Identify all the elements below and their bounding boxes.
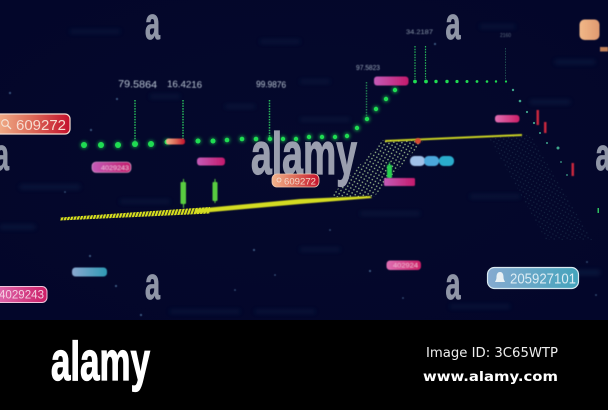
footer bar bbox=[0, 320, 608, 410]
badge: pink right bbox=[495, 115, 520, 122]
chart: value labels bbox=[118, 30, 511, 91]
badge: pink small left bbox=[92, 162, 131, 172]
badge: pink lower center: 402924 bbox=[393, 264, 419, 270]
chart: value labels: 34.2187 bbox=[406, 30, 434, 36]
chart: vertical dotted markers bbox=[135, 46, 506, 142]
badge: peach edge bbox=[600, 47, 608, 52]
watermark letters: a bbox=[0, 0, 608, 309]
badge: search 609272 left: 609272 bbox=[16, 118, 66, 134]
chart: value labels: 2160 bbox=[500, 33, 511, 39]
badge: search 609272 center: 609272 bbox=[284, 176, 316, 186]
badge: red on line bbox=[166, 138, 185, 144]
panel: chart background bbox=[0, 0, 608, 320]
badge: pink 4029243 lower left: 4029243 bbox=[0, 288, 44, 302]
chart: value labels: 16.4216 bbox=[167, 79, 202, 91]
badge: search 609272 center bbox=[272, 174, 319, 187]
watermark letters: a: a bbox=[446, 258, 461, 309]
large watermark: alamy: alamy bbox=[251, 121, 357, 187]
chart: green candlesticks bbox=[180, 162, 392, 208]
chart: value labels: 97.5823 bbox=[356, 65, 380, 72]
chart: red candlesticks bbox=[536, 110, 574, 176]
footer logo: alamy: alamy bbox=[51, 330, 150, 392]
chart: value labels: 99.9876 bbox=[256, 79, 286, 90]
badge: pink small left: 4029243 bbox=[101, 165, 129, 172]
badge: pink lower center bbox=[386, 260, 421, 270]
footer image id: Image ID: 3C65WTP bbox=[426, 346, 558, 361]
badge: pink small center bbox=[197, 158, 225, 166]
badge: bell 205927101: 205927101 bbox=[510, 272, 576, 288]
watermark letters: a: a bbox=[145, 258, 161, 309]
badge: blue lower left bbox=[72, 268, 107, 276]
chart: green dotted line bbox=[80, 80, 599, 213]
badge: pink upper right bbox=[374, 76, 408, 86]
red marker bbox=[415, 138, 421, 144]
footer url: www.alamy.com bbox=[423, 369, 558, 385]
badge: magenta middle bbox=[384, 178, 415, 186]
badge: bell 205927101 bbox=[488, 268, 578, 288]
badge: search 609272 left bbox=[0, 114, 70, 134]
small badges bbox=[72, 20, 608, 276]
chart: halftone areas bbox=[330, 134, 592, 240]
chart: yellow trend line bbox=[60, 134, 522, 220]
badge: peach top right bbox=[580, 20, 600, 40]
badge: blue segments bbox=[410, 156, 454, 166]
chart: value labels: 79.5864 bbox=[118, 79, 158, 91]
